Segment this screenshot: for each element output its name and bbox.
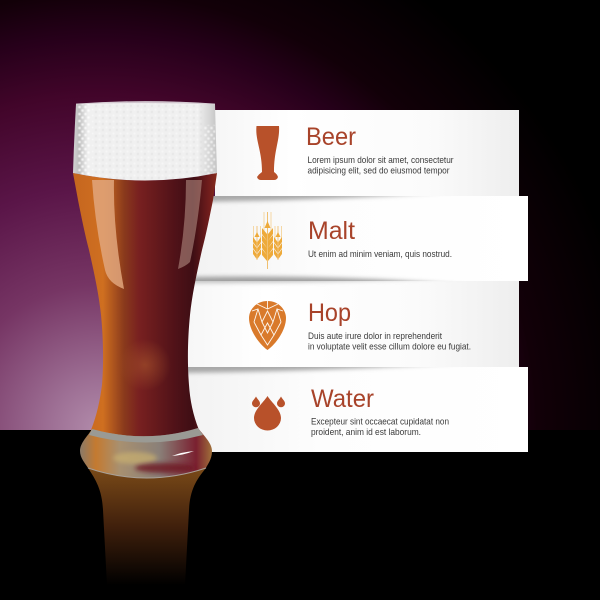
glass rim bbox=[76, 102, 215, 104]
icon: beer glass bbox=[256, 126, 279, 180]
beer glass bbox=[70, 98, 220, 585]
text: hop description: in voluptate velit esse cillum dolore eu fugiat. bbox=[308, 341, 471, 352]
text: water description: Excepteur sint occaecat cupidatat non bbox=[311, 416, 449, 426]
heading: malt: Malt bbox=[308, 217, 355, 245]
beer body bbox=[70, 170, 220, 444]
glass reflection bbox=[88, 468, 206, 585]
heading: water: Water bbox=[311, 385, 374, 413]
panel: water bbox=[180, 361, 528, 452]
heading: beer: Beer bbox=[306, 123, 356, 151]
icon: water drops bbox=[252, 396, 285, 430]
table surface bbox=[0, 430, 600, 600]
heading: hop: Hop bbox=[308, 299, 351, 327]
icon: hop cone bbox=[249, 301, 286, 350]
foam bbox=[73, 103, 217, 180]
glass base bbox=[80, 428, 212, 478]
text: malt description: Ut enim ad minim veniam, quis nostrud. bbox=[308, 248, 452, 259]
icon: wheat bbox=[253, 212, 282, 269]
panel: hop bbox=[180, 276, 519, 367]
text: water description: proident, anim id est laborum. bbox=[311, 426, 421, 437]
text: beer description: Lorem ipsum dolor sit amet, consectetur bbox=[308, 154, 454, 165]
background bbox=[0, 0, 600, 430]
panel: beer bbox=[215, 110, 519, 196]
panel: malt bbox=[195, 196, 528, 281]
text: beer description: adipisicing elit, sed do eiusmod tempor bbox=[308, 164, 450, 176]
text: hop description: Duis aute irure dolor in reprehenderit bbox=[308, 330, 442, 341]
